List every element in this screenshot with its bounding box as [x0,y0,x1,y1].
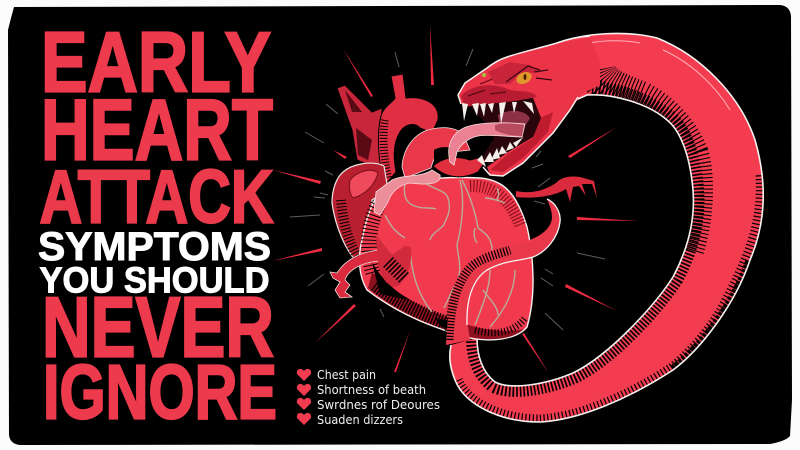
heart bullet [297,384,311,396]
label: Suaden dizzers [317,413,403,427]
label: Chest pain [317,368,376,382]
brow and face lines [506,66,552,82]
symptom: third item [297,398,440,412]
symptom: shortness of breath [297,383,426,397]
black gap under vessel [434,147,457,160]
title line: EARLY: EARLY [41,16,271,110]
tail lower outline [467,199,560,325]
red rays [272,25,638,375]
ring outer outline [450,33,763,422]
jaw shading [490,112,553,172]
symptom list [297,368,440,427]
atrium highlight [349,170,378,198]
tail hatch [449,250,510,340]
lower lobe edge hatch [475,318,525,333]
symptom: chest pain [297,368,376,382]
pulmonary shading [345,90,372,160]
left-side snake arm [330,250,380,298]
coronary vessels [385,180,515,327]
title line: SYMPTOMS: SYMPTOMS [38,225,271,269]
grey rays [290,49,605,330]
label: Swrdnes rof Deoures [317,398,440,412]
radiating burst lines [272,25,638,375]
second vessel arch [402,128,470,178]
mouth interior [470,99,541,165]
serpent head [449,36,600,176]
serpent body ring [450,33,763,422]
inner claw hatch [388,262,404,278]
pulmonary artery [337,85,382,170]
shading hatch upper right [470,186,520,225]
nostril [482,73,486,77]
mouth throat [498,111,530,132]
anatomical heart [330,74,597,345]
title [38,16,277,436]
title line: HEART: HEART [41,82,273,178]
head shape [458,38,600,176]
heart bullet [297,369,311,381]
ring fill [450,33,763,422]
inner edge long hatching [597,70,694,250]
ring highlights [590,41,730,110]
title line: ATTACK: ATTACK [40,154,274,238]
atrium hatch [341,200,358,258]
pale vessel knot [374,170,440,215]
right-side snake arm [516,177,597,202]
bottom solid shadow [372,262,460,334]
snout shading [461,85,537,106]
brow shading [488,62,540,84]
heart bullet [297,413,311,425]
lower outer edge hatching [455,175,763,422]
shading hatch left [369,205,378,275]
symptom: sudden dizziness [297,413,403,427]
aorta arch [378,74,438,185]
inner edge short hatching [477,90,693,386]
label: Shortness of beath [317,383,426,397]
bottom black hatch [375,285,462,328]
tongue [449,123,525,165]
right atrium fold [433,155,490,177]
left atrium [332,163,388,262]
ventricle bottom shading [368,272,524,339]
lower teeth [477,136,524,167]
tongue back shading [495,123,524,136]
eye [514,70,534,86]
ventricle [359,178,533,340]
serpent tail across the heart [446,199,560,345]
title line: YOU SHOULD: YOU SHOULD [40,260,270,300]
aorta shading hatch [384,120,388,178]
ring inner outline [477,95,693,386]
snout wrinkles [468,78,506,96]
outer edge dark band [673,262,750,370]
title line: IGNORE: IGNORE [43,350,277,436]
title line: NEVER: NEVER [42,280,274,376]
head outline [458,36,590,176]
heart bullet [297,398,311,410]
upper teeth [462,101,534,124]
inner claw detail [376,235,411,287]
pupil [524,74,526,80]
